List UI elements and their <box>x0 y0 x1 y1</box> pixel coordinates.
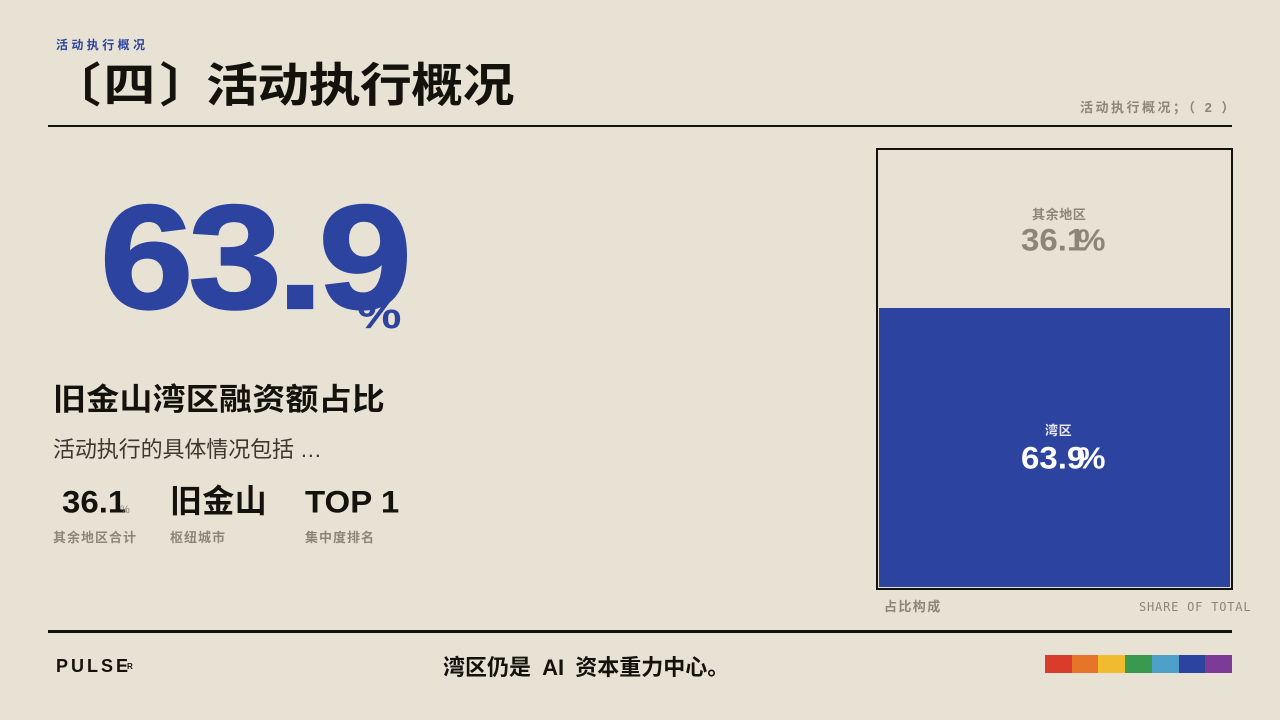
big number percent sign: % <box>357 288 401 338</box>
stat unit: % <box>120 504 130 516</box>
segment: bay area <box>879 308 1230 587</box>
panel: share of total stacked bar <box>876 148 1233 590</box>
segment label: 其余地区 <box>1032 207 1086 222</box>
description: 活动执行的具体情况包括 … <box>53 437 322 462</box>
segment value: 63.9 <box>1021 440 1085 475</box>
chart caption: 占比构成 <box>884 599 942 614</box>
page marker: 活动执行概况；（ 2 ） <box>1080 100 1237 115</box>
segment: other regions <box>1021 207 1105 257</box>
stat: concentration rank <box>305 484 399 545</box>
stat value: 36.1 <box>62 484 126 519</box>
stat label: 枢纽城市 <box>170 530 226 545</box>
segment percent: % <box>1077 223 1105 257</box>
stat value: 旧金山 <box>170 483 267 519</box>
footer takeaway: 湾区仍是 AI 资本重力中心。 <box>443 655 729 680</box>
title: 〔四〕活动执行概况 <box>49 60 514 112</box>
stat: other regions <box>53 484 137 545</box>
stat value: TOP 1 <box>305 484 399 519</box>
stat: hub city <box>170 483 267 545</box>
chart caption english: SHARE OF TOTAL <box>1139 600 1251 614</box>
segment percent: % <box>1077 441 1105 475</box>
big number: 63.9 <box>100 174 407 340</box>
segment value: 36.1 <box>1021 222 1085 257</box>
stat label: 其余地区合计 <box>53 530 137 545</box>
brand logo: PULSE <box>56 656 131 676</box>
brand logo: R <box>127 662 133 671</box>
stat label: 集中度排名 <box>305 530 375 545</box>
rainbow colour strip <box>1045 655 1232 673</box>
segment label: 湾区 <box>1045 423 1072 438</box>
footer rule <box>48 630 1232 633</box>
eyebrow label: 活动执行概况 <box>56 38 148 52</box>
metric heading: 旧金山湾区融资额占比 <box>53 382 385 417</box>
header rule <box>48 125 1232 127</box>
